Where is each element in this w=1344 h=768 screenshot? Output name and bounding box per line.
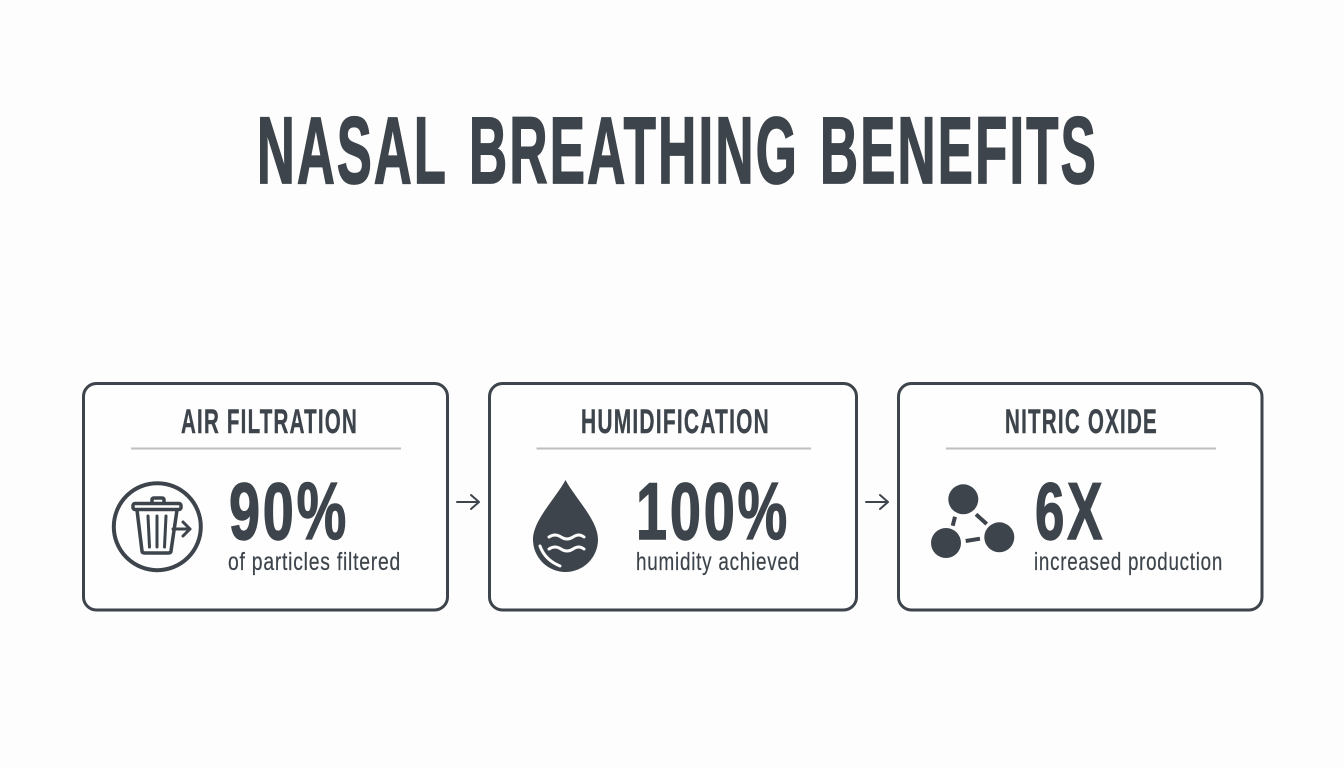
title: BENEFITS xyxy=(820,98,1098,204)
stat: 6X: 6X xyxy=(1035,467,1105,557)
icon: water drop xyxy=(533,480,598,572)
heading: nitric oxide: NITRIC OXIDE xyxy=(1005,403,1158,441)
stat: 100%: 100% xyxy=(636,467,790,557)
caption: increased production: increased production xyxy=(1034,548,1223,576)
arrow: filtration to humidification xyxy=(457,495,479,509)
icon: molecule xyxy=(931,484,1014,558)
title: BREATHING xyxy=(469,98,799,204)
caption: of particles filtered: of particles filtered xyxy=(228,548,401,576)
stat: 90%: 90% xyxy=(229,467,349,557)
icon: trash can with arrow in circle xyxy=(114,483,201,570)
heading: humidification: HUMIDIFICATION xyxy=(581,403,770,441)
caption: humidity achieved: humidity achieved xyxy=(636,548,800,576)
heading: air filtration: AIR FILTRATION xyxy=(181,403,358,441)
title: NASAL xyxy=(257,98,448,204)
arrow: humidification to nitric oxide xyxy=(866,495,888,509)
panel: humidification xyxy=(490,384,856,610)
panel: air filtration xyxy=(84,384,448,610)
panel: nitric oxide xyxy=(898,384,1262,610)
